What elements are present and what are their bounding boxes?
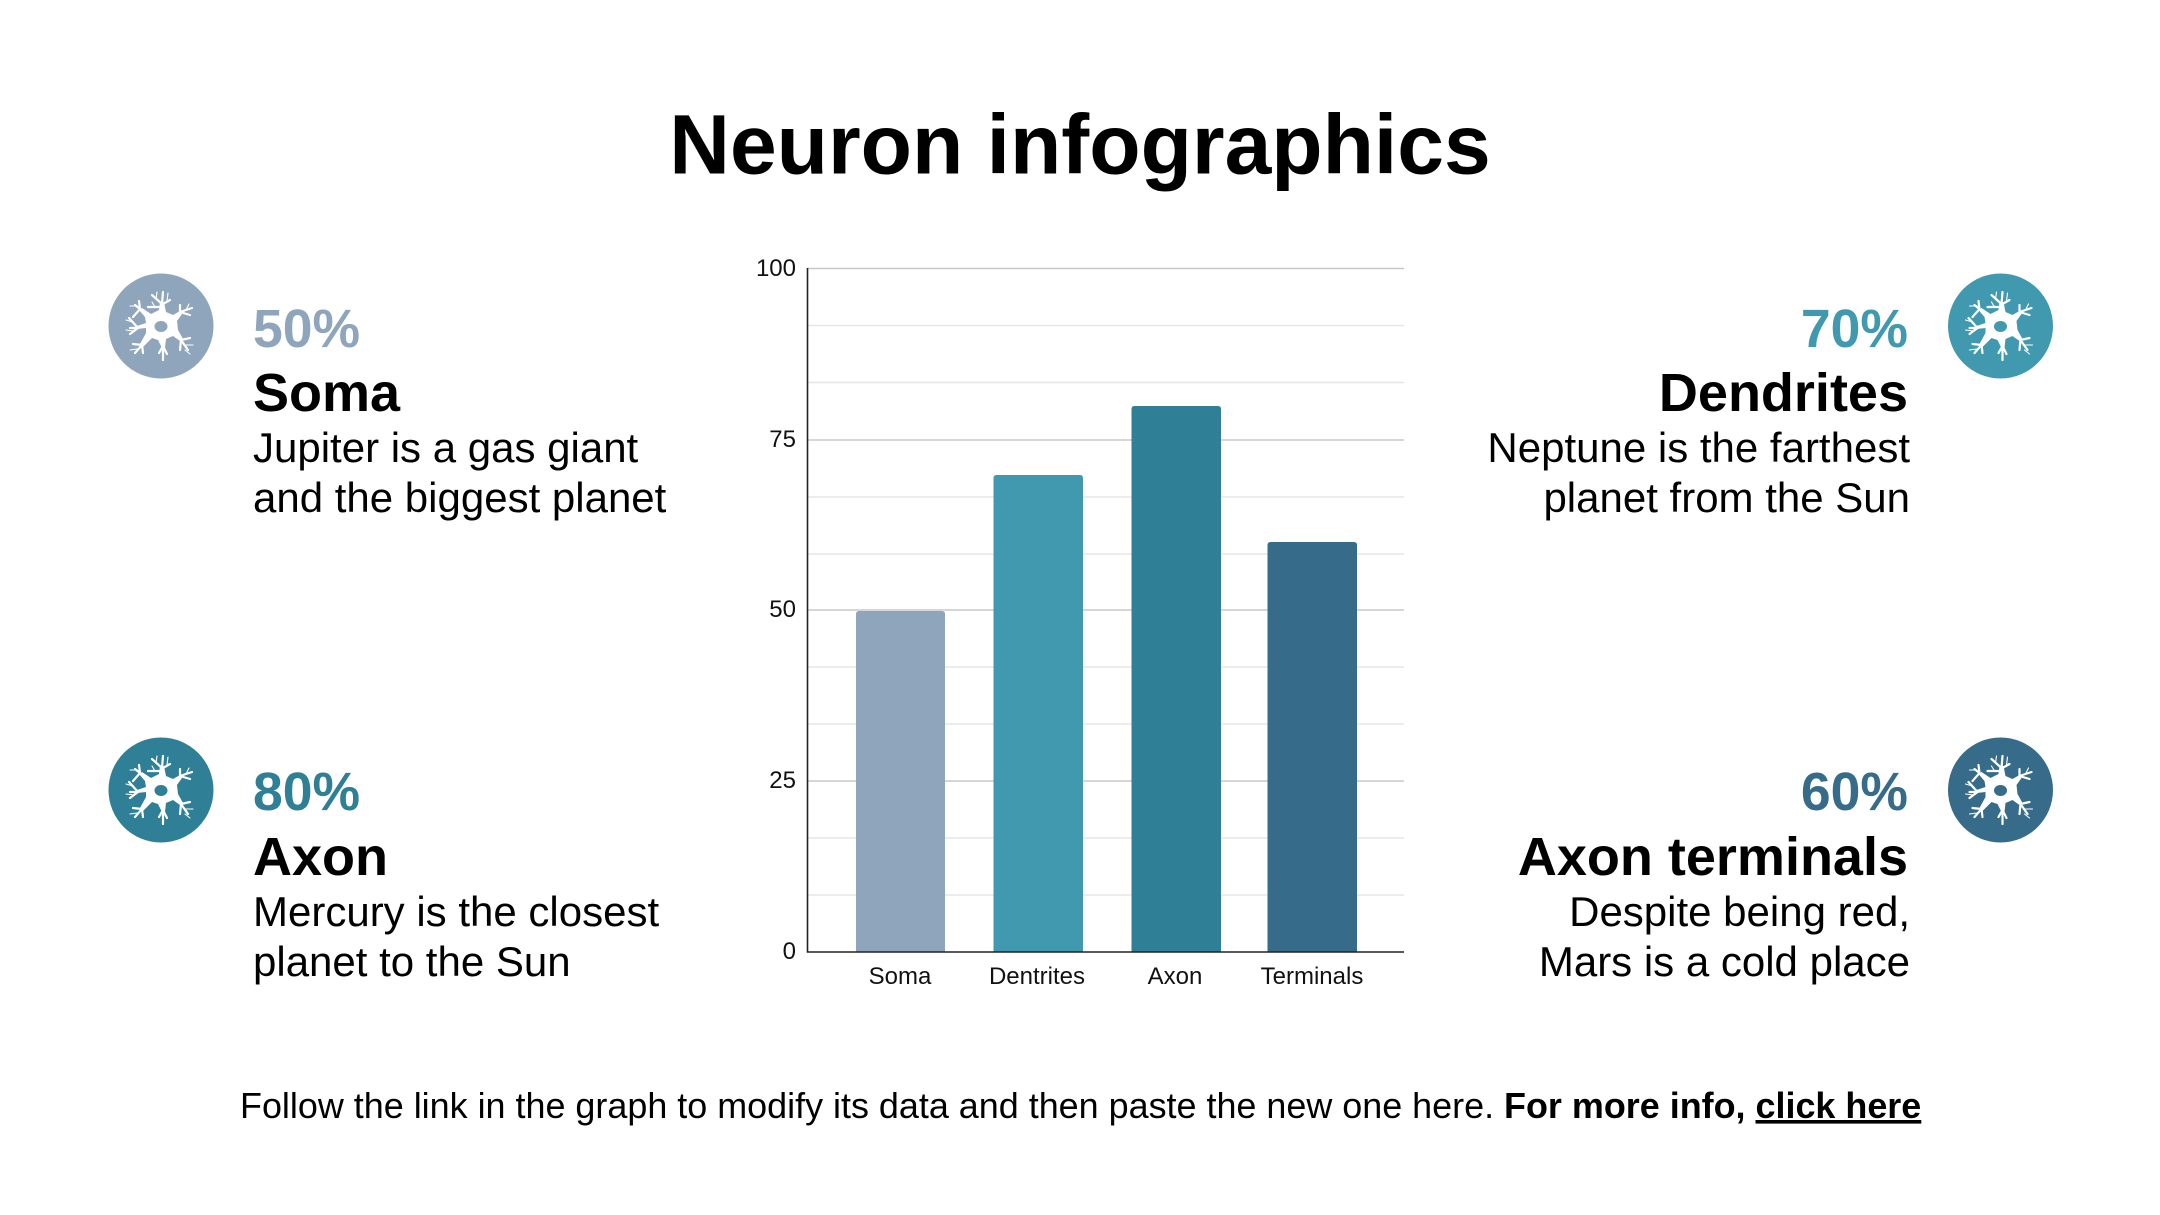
dendrites percentage: 70% xyxy=(1801,300,1908,359)
terminals percentage: 60% xyxy=(1801,763,1908,822)
bar: dendrites xyxy=(994,475,1083,952)
title: Neuron infographics xyxy=(669,98,1491,192)
soma description: Jupiter is a gas giant xyxy=(253,424,639,471)
terminals heading: Axon terminals xyxy=(1518,827,1908,887)
x axis labels: Axon xyxy=(1148,963,1202,990)
icon: terminals neuron xyxy=(1948,738,2053,842)
terminals description: Despite being red, xyxy=(1569,888,1910,935)
x axis labels: Soma xyxy=(869,963,932,990)
y axis labels xyxy=(756,255,796,965)
panel: soma xyxy=(108,274,667,521)
footer note: Follow the link in the graph to modify its data and then paste the new one here. For more info, click here xyxy=(240,1085,1921,1126)
axon percentage: 80% xyxy=(253,763,360,822)
dendrites description: Neptune is the farthest xyxy=(1487,424,1910,471)
axon description: Mercury is the closest xyxy=(253,888,659,935)
x axis labels: Dentrites xyxy=(989,963,1085,990)
y axis labels: 75 xyxy=(769,426,796,453)
soma percentage: 50% xyxy=(253,300,360,359)
soma description: and the biggest planet xyxy=(253,474,667,521)
bar: soma xyxy=(856,611,945,952)
panel: axon xyxy=(108,738,659,985)
axon heading: Axon xyxy=(253,827,388,887)
dendrites heading: Dendrites xyxy=(1659,363,1908,423)
panel: axon terminals xyxy=(1518,738,2053,985)
axes xyxy=(808,268,1404,952)
y axis labels: 100 xyxy=(756,255,796,282)
y axis labels: 50 xyxy=(769,596,796,623)
axon description: planet to the Sun xyxy=(253,938,571,985)
soma heading: Soma xyxy=(253,363,401,423)
dendrites description: planet from the Sun xyxy=(1543,474,1910,521)
icon: axon neuron xyxy=(108,738,214,842)
bar: terminals xyxy=(1268,542,1357,952)
icon: soma neuron xyxy=(108,274,214,378)
x axis labels: Terminals xyxy=(1261,963,1363,990)
panel: dendrites xyxy=(1487,274,2053,521)
y axis labels: 25 xyxy=(769,767,796,794)
bar chart xyxy=(756,255,1404,990)
bar: axon xyxy=(1132,406,1221,952)
y axis labels: 0 xyxy=(783,938,796,965)
x axis labels xyxy=(869,963,1363,990)
icon: dendrites neuron xyxy=(1948,274,2053,378)
terminals description: Mars is a cold place xyxy=(1539,938,1910,985)
